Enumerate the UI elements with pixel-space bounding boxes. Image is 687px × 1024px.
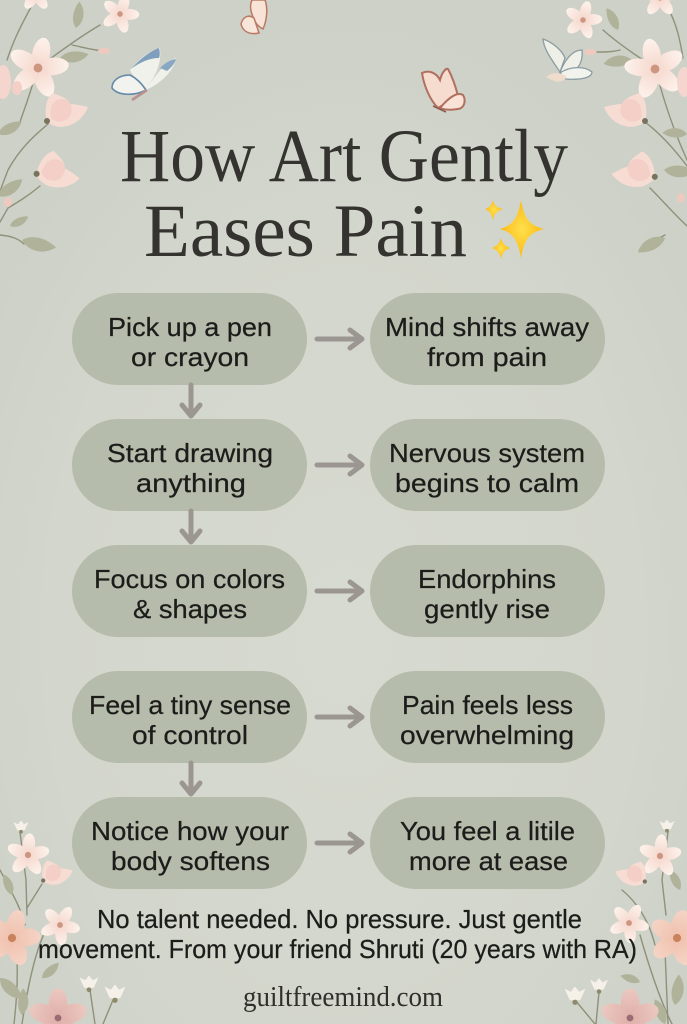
- result: nervous system: [370, 419, 605, 511]
- result: more at ease: You feel a litile: [400, 816, 575, 846]
- result: endorphins: Endorphins: [418, 564, 556, 594]
- arrow: down 3: [182, 763, 200, 794]
- arrow: down 2: [182, 511, 200, 542]
- title: [120, 115, 568, 273]
- floral corner: bottom right: [564, 820, 687, 1024]
- title: How Art Gently: [120, 115, 568, 198]
- butterfly: top pink: [241, 0, 267, 34]
- step: focus on colors: [72, 545, 307, 637]
- step: focus on colors: Focus on colors: [94, 564, 285, 594]
- step: pick up a pen: or crayon: [131, 342, 249, 372]
- butterfly: pink: [422, 69, 465, 112]
- flow row 4: [72, 671, 605, 763]
- step: pick up a pen: Pick up a pen: [108, 312, 272, 342]
- step: notice body: Notice how your: [91, 816, 289, 846]
- butterfly: blue: [112, 48, 176, 100]
- closing note: [38, 904, 637, 964]
- arrow: right: [317, 330, 362, 348]
- flow row 2: [72, 419, 605, 511]
- closing note: No talent needed. No pressure. Just gentle: [97, 904, 582, 934]
- arrow: down 1: [182, 385, 200, 416]
- result: pain feels less: [370, 671, 605, 763]
- result: more at ease: more at ease: [409, 846, 568, 876]
- step: start drawing: anything: [136, 468, 246, 498]
- flow row 1: [72, 293, 605, 385]
- arrow: right: [317, 834, 362, 852]
- step: feel a tiny sense: Feel a tiny sense: [89, 690, 291, 720]
- closing note: movement. From your friend Shruti (20 years with RA): [38, 934, 637, 964]
- result: mind shifts: from pain: [427, 342, 547, 372]
- arrow: right: [317, 456, 362, 474]
- butterfly: white: [543, 39, 592, 82]
- result: mind shifts: Mind shifts away: [385, 312, 589, 342]
- result: mind shifts: [370, 293, 605, 385]
- website: guiltfreemind.com: [243, 981, 443, 1013]
- result: pain feels less: overwhelming: [400, 720, 574, 750]
- floral corner: top right: [559, 0, 687, 254]
- step: notice body: [72, 797, 307, 889]
- icon: sparkles: [485, 200, 544, 259]
- title: Eases Pain: [144, 190, 467, 273]
- result: endorphins: [370, 545, 605, 637]
- step: feel a tiny sense: [72, 671, 307, 763]
- arrow: right: [317, 582, 362, 600]
- step: notice body: body softens: [111, 846, 270, 876]
- result: pain feels less: Pain feels less: [402, 690, 573, 720]
- step: start drawing: [72, 419, 307, 511]
- result: endorphins: gently rise: [424, 594, 550, 624]
- floral corner: bottom left: [0, 820, 126, 1024]
- result: nervous system: begins to calm: [395, 468, 579, 498]
- result: more at ease: [370, 797, 605, 889]
- step: focus on colors: & shapes: [133, 594, 247, 624]
- flow row 5: [72, 797, 605, 889]
- step: start drawing: Start drawing: [107, 438, 273, 468]
- step: feel a tiny sense: of control: [132, 720, 248, 750]
- floral corner: top left: [0, 0, 145, 258]
- arrow: right: [317, 708, 362, 726]
- step: pick up a pen: [72, 293, 307, 385]
- result: nervous system: Nervous system: [389, 438, 585, 468]
- flow row 3: [72, 545, 605, 637]
